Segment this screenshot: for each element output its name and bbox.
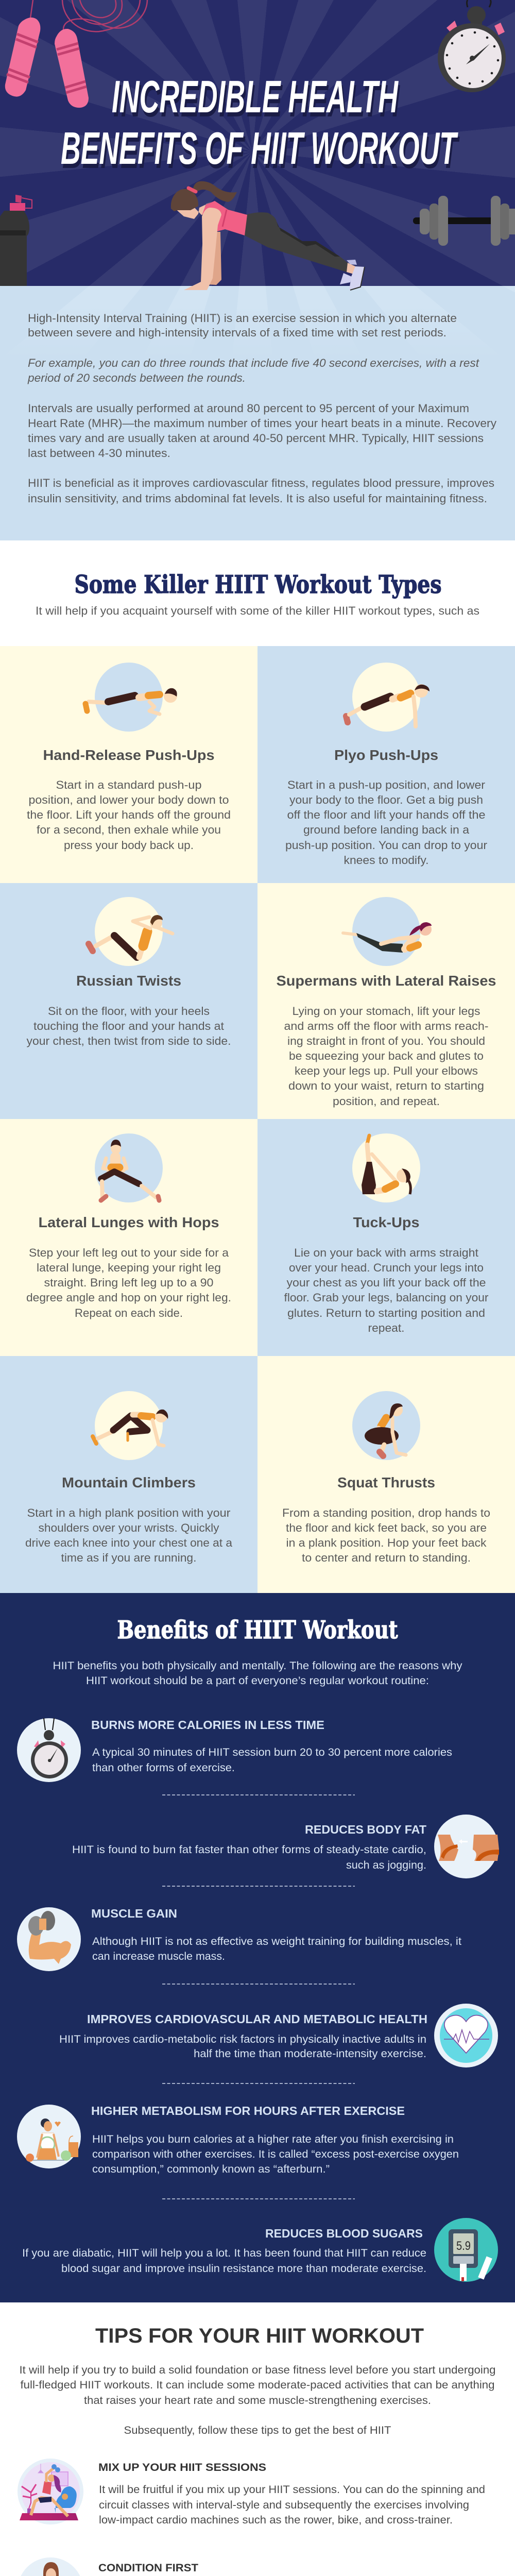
panel: Mountain Climbers (0, 1356, 258, 1593)
icon: woman with healthy food (26, 2119, 78, 2162)
panel: Plyo Push-Ups (258, 646, 515, 883)
benefit: muscle gain (17, 1907, 461, 1971)
panel: Tuck-Ups: your chest as you lift your back off the (286, 1276, 486, 1289)
panel: Russian Twists: touching the floor and your hands at (33, 1020, 224, 1032)
heading: Benefits of HIIT Workout: Benefits of HIIT Workout (117, 1616, 398, 1645)
panel: Plyo Push-Ups: ground before landing back in a (303, 823, 470, 836)
panel: Squat Thrusts: From a standing position, drop hands to (282, 1506, 490, 1519)
panel: introduction: High-Intensity Interval Training (HIIT) is an exercise session in which you alternate (28, 312, 457, 325)
text: tips intro: full-fledged HIIT workouts. It can include some moderate-paced activities that can be anything (21, 2379, 494, 2391)
panel: benefits (0, 1593, 515, 2302)
tip: condition first: CONDITION FIRST (98, 2562, 198, 2574)
panel: Supermans with Lateral Raises: down to your waist, return to starting (288, 1079, 484, 1092)
panel: Tuck-Ups: floor. Grab your legs, balancing on your (284, 1291, 488, 1304)
benefit: cardiovascular and metabolic health: half the time than moderate-intensity exercise. (194, 2048, 426, 2060)
icon: glucose meter: 5.9 (456, 2239, 471, 2253)
panel: Russian Twists: your chest, then twist from side to side. (27, 1035, 231, 1047)
benefit: higher metabolism (17, 2104, 459, 2175)
benefit: reduces body fat (72, 1815, 499, 1878)
icon: stopwatch (438, 0, 506, 92)
panel: introduction (0, 286, 515, 540)
title (61, 71, 460, 178)
panel: Lateral Lunges with Hops: Step your left leg out to your side for a (29, 1246, 229, 1259)
panel: Tuck-Ups: Lie on your back with arms straight (294, 1246, 478, 1259)
panel: Russian Twists: Russian Twists (76, 973, 181, 989)
panel: Squat Thrusts: the floor and kick feet back, so you are (286, 1521, 487, 1534)
tip: mix up your HIIT sessions: MIX UP YOUR HIIT SESSIONS (98, 2462, 266, 2473)
benefit: cardiovascular and metabolic health: IMPROVES CARDIOVASCULAR AND METABOLIC HEALTH (87, 2012, 427, 2026)
panel: Supermans with Lateral Raises: be squeezing your back and glutes to (289, 1049, 484, 1062)
benefit: higher metabolism: HIIT helps you burn calories at a higher rate after you finish exercising in (92, 2133, 454, 2145)
panel: Plyo Push-Ups: Plyo Push-Ups (334, 747, 438, 763)
icon: woman with dumbbells (27, 2562, 72, 2576)
benefit: reduces body fat: HIIT is found to burn fat faster than other forms of steady-state cardio, (72, 1844, 426, 1856)
panel: Hand-Release Push-Ups: for a second, then exhale while you (37, 823, 221, 836)
benefit: higher metabolism: comparison with other exercises. It is called “excess post-exercise oxygen (92, 2148, 459, 2160)
panel: introduction: For example, you can do three rounds that include five 40 second exercises, with a rest (28, 357, 479, 369)
panel: Lateral Lunges with Hops: lateral lunge, keeping your right leg (37, 1261, 221, 1274)
panel: Hand-Release Push-Ups: press your body back up. (64, 839, 194, 852)
benefit: reduces blood sugars: If you are diabatic, HIIT will help you a lot. It has been found that HIIT can reduce (22, 2247, 426, 2259)
faint rays at top of intro panel (0, 286, 515, 358)
panel: Squat Thrusts: Squat Thrusts (337, 1475, 435, 1490)
icon: heart with pulse (440, 2008, 492, 2063)
icon: superman figure (343, 922, 432, 953)
text: benefits intro (53, 1660, 462, 1687)
panel: introduction: between severe and high-intensity intervals of a fixed time with set rest periods. (28, 326, 447, 339)
benefit: reduces blood sugars (22, 2218, 498, 2282)
panel: Plyo Push-Ups: push-up position. You can drop to your (285, 839, 487, 852)
panel: Russian Twists (0, 883, 258, 1119)
panel: introduction: period of 20 seconds between the rounds. (27, 371, 246, 384)
panel: Mountain Climbers: drive each knee into your chest one at a (25, 1536, 233, 1549)
benefit: burns more calories: than other forms of exercise. (92, 1762, 235, 1774)
panel: Supermans with Lateral Raises: Lying on your stomach, lift your legs (293, 1005, 480, 1018)
panel: Supermans with Lateral Raises: ing straight in front of you. You should (287, 1035, 485, 1047)
panel: introduction: Heart Rate (MHR)—the maximum number of times your heart beats in a minute. Recovery (28, 417, 496, 430)
text: tips intro: that raises your heart rate and some muscle-strengthening exercises. (84, 2395, 431, 2406)
icon: plyo push-up figure (346, 684, 430, 726)
icon: tuck-up figure (362, 1136, 410, 1194)
panel: Lateral Lunges with Hops: degree angle and hop on your right leg. (26, 1291, 231, 1304)
benefit: burns more calories: BURNS MORE CALORIES IN LESS TIME (91, 1718, 324, 1732)
panel: Hand-Release Push-Ups (0, 646, 258, 883)
panel: introduction: last between 4-30 minutes. (28, 447, 170, 460)
text: benefits intro: HIIT benefits you both physically and mentally. The following are the reasons why (53, 1660, 462, 1672)
hero banner background (0, 0, 515, 286)
icon: jump rope (5, 0, 147, 108)
panel: Lateral Lunges with Hops: Repeat on each side. (75, 1307, 183, 1319)
tip: mix up your HIIT sessions: It will be fruitful if you mix up your HIIT sessions. You can do the spinning and (99, 2484, 485, 2496)
panel: Mountain Climbers: shoulders over your wrists. Quickly (38, 1521, 219, 1534)
benefit: higher metabolism: consumption,” commonly known as “afterburn.” (92, 2163, 330, 2175)
benefit: cardiovascular and metabolic health (59, 2004, 498, 2067)
icon: water bottle (0, 195, 32, 286)
benefit: reduces blood sugars: blood sugar and improve insulin resistance more than moderate exercise. (61, 2263, 426, 2275)
heading: Some Killer HIIT Workout Types: Some Killer HIIT Workout Types (74, 570, 442, 599)
panel: Tuck-Ups: Tuck-Ups (353, 1214, 419, 1230)
tip: mix up your HIIT sessions (18, 2459, 485, 2526)
panel: Tuck-Ups: repeat. (368, 1321, 405, 1334)
text: tips intro: Subsequently, follow these tips to get the best of HIIT (124, 2425, 391, 2436)
text: benefits intro: HIIT workout should be a part of everyone’s regular workout routine: (86, 1675, 429, 1687)
icon: russian twist figure (89, 915, 173, 957)
icon: flexed arm with dumbbell (28, 1911, 71, 1964)
panel: Mountain Climbers: Mountain Climbers (62, 1475, 196, 1490)
tip: mix up your HIIT sessions: circuit classes with interval-style and subsequently the exercises involving (99, 2499, 469, 2511)
panel: Lateral Lunges with Hops (0, 1119, 258, 1356)
panel: Supermans with Lateral Raises: and arms off the floor with arms reach- (284, 1020, 488, 1032)
icon: dumbbell (413, 196, 515, 246)
panel: Squat Thrusts (258, 1356, 515, 1593)
benefit: burns more calories: A typical 30 minutes of HIIT session burn 20 to 30 percent more calories (92, 1747, 452, 1758)
panel: Lateral Lunges with Hops: Lateral Lunges with Hops (38, 1214, 219, 1230)
panel: introduction: insulin sensitivity, and trims abdominal fat levels. It is also useful for maintaining fitness. (28, 492, 487, 505)
panel: Hand-Release Push-Ups: Start in a standard push-up (56, 778, 201, 791)
benefit: muscle gain: Although HIIT is not as effective as weight training for building muscles, it (92, 1936, 461, 1947)
panel: introduction: times vary and are usually taken at around 40-50 percent MHR. Typically, HIIT sessions (28, 432, 484, 445)
panel: Plyo Push-Ups: off the floor and lift your hands off the (287, 808, 485, 821)
panel: Tuck-Ups (258, 1119, 515, 1356)
icon: glucose meter (449, 2229, 492, 2281)
icon: squat thrust figure (365, 1403, 406, 1456)
panel: Hand-Release Push-Ups: position, and lower your body down to (29, 793, 229, 806)
panel: Hand-Release Push-Ups: the floor. Lift your hands off the ground (27, 808, 231, 821)
icon: mountain climber figure (93, 1410, 168, 1446)
icon: woman exercising in room (20, 2462, 80, 2521)
text: tips intro (20, 2364, 495, 2436)
benefit: reduces body fat: REDUCES BODY FAT (305, 1823, 426, 1836)
panel: Supermans with Lateral Raises: Supermans with Lateral Raises (276, 973, 496, 989)
panel: introduction: HIIT is beneficial as it improves cardiovascular fitness, regulates blood pressure, improves (28, 477, 494, 489)
heading: tips for your HIIT workout: TIPS FOR YOUR HIIT WORKOUT (95, 2325, 424, 2347)
panel: Plyo Push-Ups: Start in a push-up position, and lower (287, 778, 485, 791)
benefit: reduces blood sugars: REDUCES BLOOD SUGARS (265, 2227, 423, 2240)
benefit: muscle gain: MUSCLE GAIN (91, 1907, 177, 1920)
tip: condition first (18, 2557, 479, 2576)
icon: lateral lunge figure (101, 1140, 159, 1200)
panel: Mountain Climbers: Start in a high plank position with your (27, 1506, 231, 1519)
panel: Tuck-Ups: glutes. Return to starting position and (287, 1307, 485, 1319)
panel: Plyo Push-Ups: your body to the floor. Get a big push (289, 793, 483, 806)
panel: Russian Twists: Sit on the floor, with your heels (48, 1005, 210, 1018)
panel: Mountain Climbers: time as if you are running. (61, 1551, 197, 1564)
panel: Tuck-Ups: over your head. Crunch your legs into (289, 1261, 484, 1274)
benefit: reduces body fat: such as jogging. (346, 1859, 426, 1871)
panel: Squat Thrusts: in a plank position. Hop your feet back (286, 1536, 487, 1549)
panel: Lateral Lunges with Hops: straight. Bring left leg up to a 90 (44, 1276, 213, 1289)
text: workout types intro: It will help if you acquaint yourself with some of the killer HIIT workout types, such as (36, 604, 479, 617)
icon: waist shrinking (438, 1835, 499, 1861)
benefit: muscle gain: can increase muscle mass. (92, 1951, 225, 1962)
benefit: cardiovascular and metabolic health: HIIT improves cardio-metabolic risk factors in physically inactive adults in (59, 2033, 426, 2045)
benefit: higher metabolism: HIGHER METABOLISM FOR HOURS AFTER EXERCISE (91, 2104, 405, 2117)
icon: stopwatch (31, 1718, 68, 1778)
panel: Hand-Release Push-Ups: Hand-Release Push-Ups (43, 747, 214, 763)
panel: Supermans with Lateral Raises: keep your legs up. Pull your elbows (295, 1064, 478, 1077)
panel: Supermans with Lateral Raises (258, 883, 515, 1119)
panel: Squat Thrusts: to center and return to standing. (302, 1551, 471, 1564)
panel: Supermans with Lateral Raises: position, and repeat. (333, 1095, 440, 1108)
tip: mix up your HIIT sessions: low-impact cardio machines such as the rower, bike, and cross-trainer. (99, 2514, 453, 2526)
benefit: burns more calories (17, 1718, 452, 1782)
panel: Plyo Push-Ups: knees to modify. (344, 854, 428, 867)
text: tips intro: It will help if you try to build a solid foundation or base fitness level before you start undergoing (20, 2364, 495, 2376)
illustration: woman in plank (171, 181, 365, 290)
panel: introduction: Intervals are usually performed at around 80 percent to 95 percent of your Maximum (28, 402, 469, 415)
icon: hand-release push-up figure (85, 688, 177, 714)
